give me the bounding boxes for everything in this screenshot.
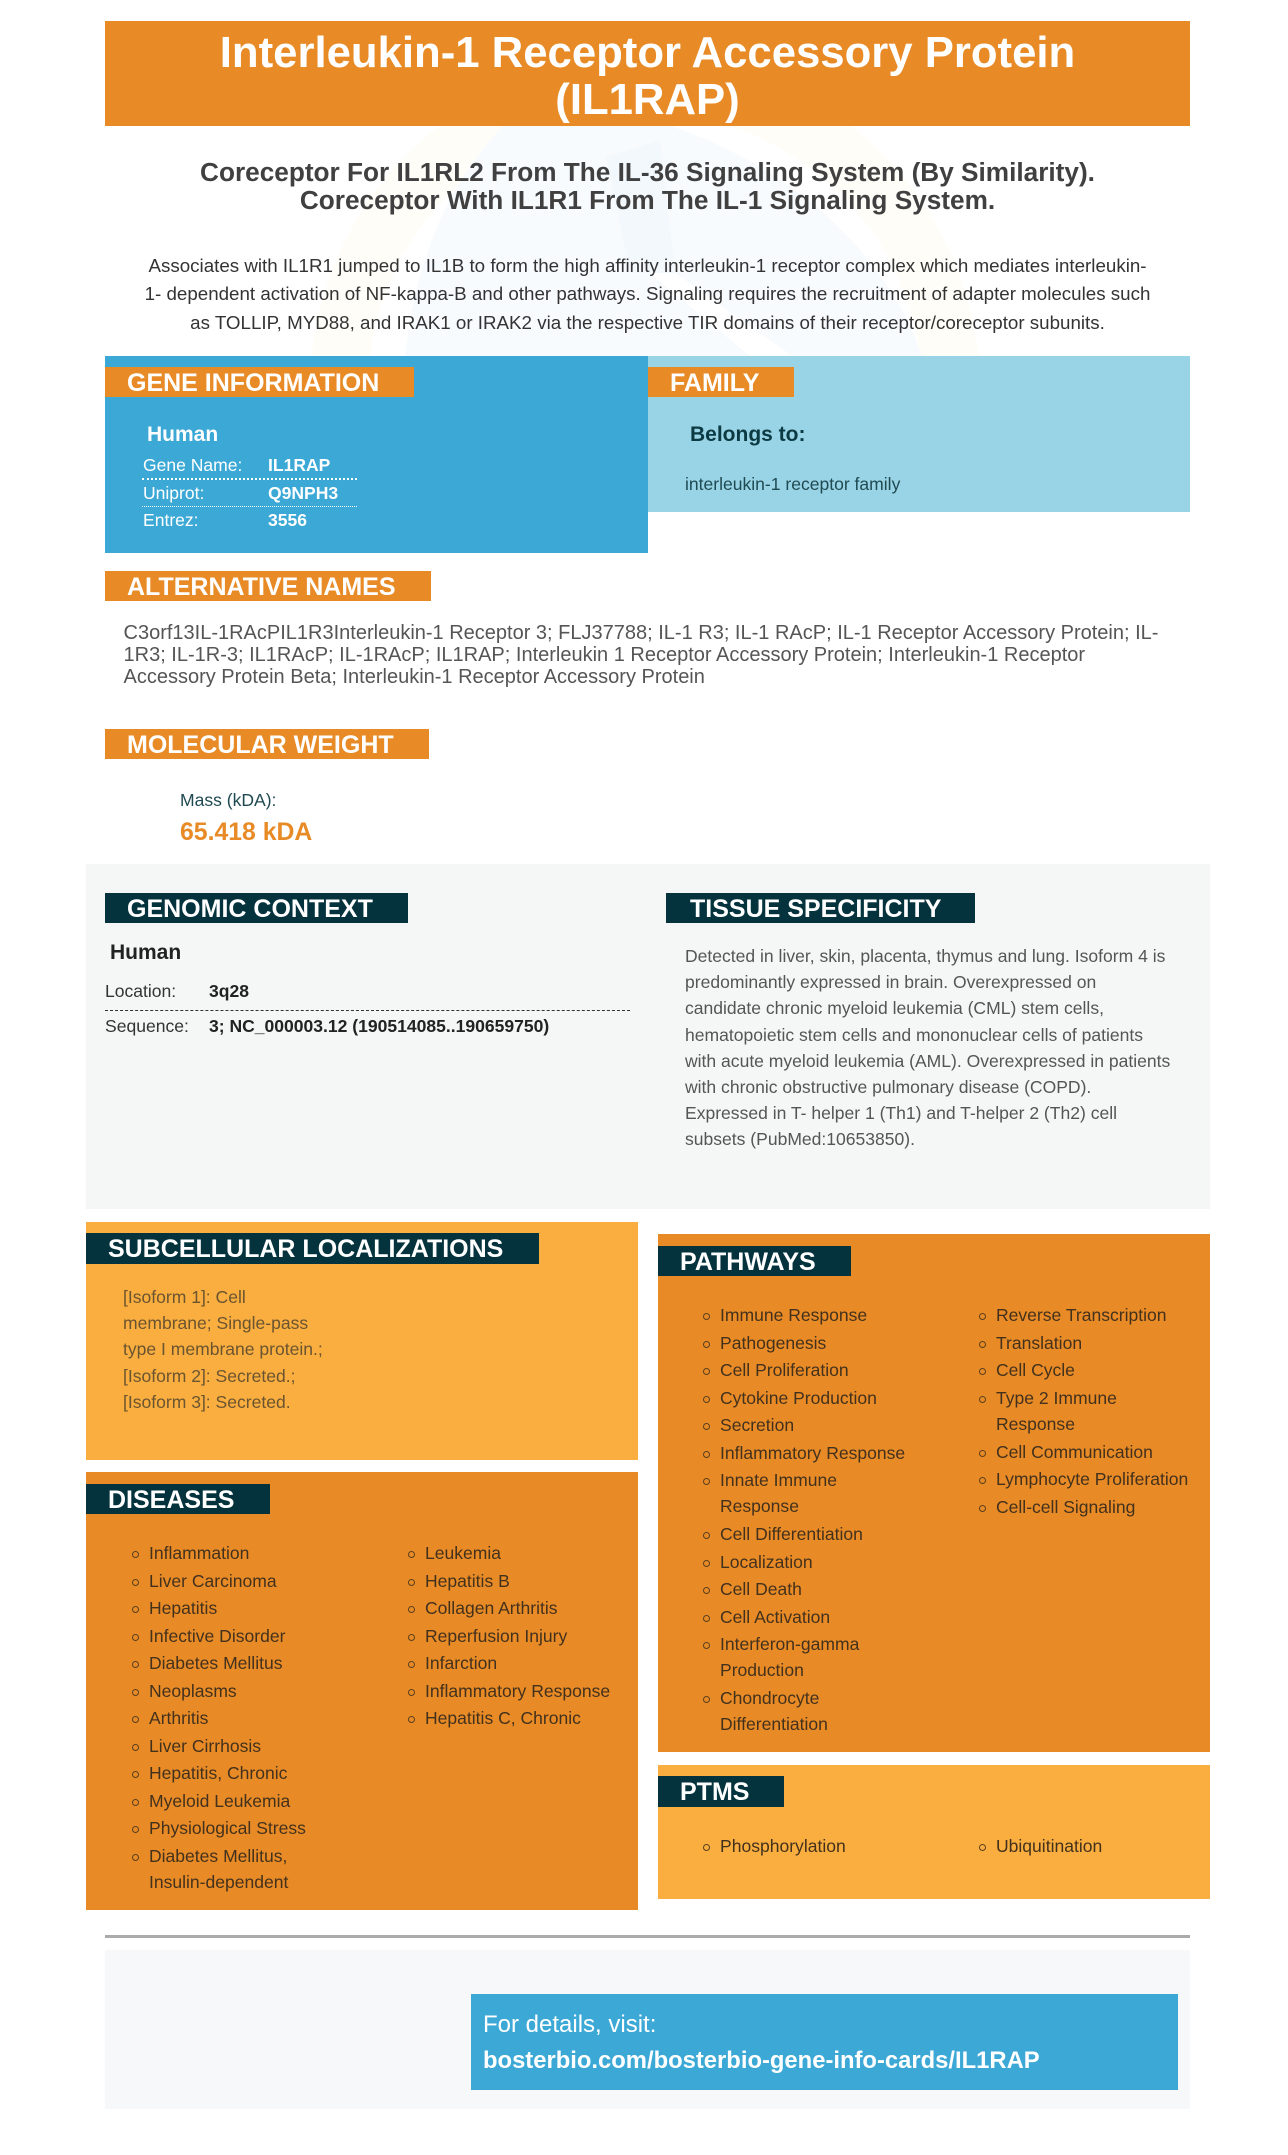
pathway list column 1: Immune Response [720, 1304, 867, 1324]
disease list column 2: Inflammatory Response [425, 1680, 610, 1700]
localization text: [Isoform 1]: Cell [123, 1287, 246, 1307]
disease list column 1 [132, 1542, 306, 1892]
pathway list column 1: Chondrocyte [720, 1688, 819, 1708]
location row: 3q28 [209, 981, 249, 1001]
localization text [123, 1287, 323, 1412]
heading: diseases: DISEASES [108, 1486, 234, 1514]
gene info table: Entrez: [143, 510, 199, 530]
intro paragraph: as TOLLIP, MYD88, and IRAK1 or IRAK2 via the respective TIR domains of their receptor/coreceptor subunits. [190, 312, 1105, 333]
sequence row: Sequence: [105, 1016, 189, 1036]
tissue specificity text: Detected in liver, skin, placenta, thymus and lung. Isoform 4 is [685, 946, 1165, 966]
panel: diseases [86, 1472, 638, 1910]
heading: pathways: PATHWAYS [680, 1248, 816, 1276]
disease list column 2 [408, 1542, 610, 1728]
title banner: Interleukin-1 Receptor Accessory Protein [220, 28, 1075, 77]
pathway list column 2: Lymphocyte Proliferation [996, 1468, 1188, 1488]
subtitle: Coreceptor For IL1RL2 From The IL-36 Signaling System (By Similarity). [200, 157, 1095, 187]
subtitle: Coreceptor With IL1R1 From The IL-1 Signaling System. [300, 185, 995, 215]
disease list column 1: Physiological Stress [149, 1818, 306, 1838]
belongs to label: Belongs to: [690, 423, 806, 446]
panel: gene information [105, 356, 648, 553]
disease list column 1: Diabetes Mellitus, [149, 1846, 287, 1866]
species label: Human [110, 941, 181, 964]
pathway list column 1: Innate Immune [720, 1470, 837, 1490]
pathway list column 2: Cell Cycle [996, 1360, 1075, 1380]
pathway list column 1: Cell Activation [720, 1606, 830, 1626]
gene info table [142, 455, 357, 530]
title banner [105, 21, 1190, 126]
panel: subcellular localizations [86, 1222, 638, 1460]
heading: PTMs [658, 1776, 784, 1807]
tissue specificity text [685, 946, 1170, 1149]
subtitle [200, 157, 1095, 215]
tissue specificity text: Expressed in T- helper 1 (Th1) and T-helper 2 (Th2) cell [685, 1103, 1117, 1123]
intro paragraph [145, 255, 1150, 333]
callout: details link [471, 1994, 1178, 2090]
panel: PTMs [658, 1765, 1210, 1899]
callout: details link: bosterbio.com/bosterbio-gene-info-cards/IL1RAP [483, 2046, 1040, 2074]
pathway list column 2: Response [996, 1414, 1075, 1434]
disease list column 1: Arthritis [149, 1708, 208, 1728]
pathway list column 1: Production [720, 1660, 804, 1680]
location row [105, 981, 249, 1001]
sequence row: 3; NC_000003.12 (190514085..190659750) [209, 1016, 549, 1036]
pathway list column 1: Inflammatory Response [720, 1442, 905, 1462]
disease list column 1: Insulin-dependent [149, 1872, 288, 1892]
pathway list column 1: Localization [720, 1552, 813, 1572]
PTM list column 1: Phosphorylation [720, 1836, 846, 1856]
alternative names text: Accessory Protein Beta; Interleukin-1 Receptor Accessory Protein [124, 666, 705, 688]
alternative names text [124, 622, 1158, 688]
disease list column 2: Hepatitis C, Chronic [425, 1708, 581, 1728]
disease list column 2: Leukemia [425, 1542, 501, 1562]
pathway list column 2: Cell-cell Signaling [996, 1496, 1135, 1516]
disease list column 1: Hepatitis, Chronic [149, 1762, 287, 1782]
location row: Location: [105, 981, 176, 1001]
PTM list column 2: Ubiquitination [996, 1836, 1102, 1856]
heading: family [648, 367, 794, 397]
mass value: 65.418 kDA [180, 819, 312, 846]
callout: details link: For details, visit: [483, 2011, 656, 2038]
family value: interleukin-1 receptor family [685, 474, 900, 494]
pathway list column 1: Pathogenesis [720, 1332, 826, 1352]
panel: pathways [658, 1234, 1210, 1752]
disease list column 1: Myeloid Leukemia [149, 1790, 290, 1810]
disease list column 1: Neoplasms [149, 1680, 237, 1700]
background watermark logo [606, 140, 675, 273]
tissue specificity text: with acute myeloid leukemia (AML). Overexpressed in patients [685, 1051, 1170, 1071]
heading: subcellular localizations: SUBCELLULAR LOCALIZATIONS [108, 1235, 503, 1263]
pathway list column 1 [703, 1304, 905, 1734]
mass label: Mass (kDA): [180, 790, 276, 810]
pathway list column 1: Cytokine Production [720, 1388, 877, 1408]
localization text: type I membrane protein.; [123, 1339, 323, 1359]
heading: diseases [86, 1484, 270, 1514]
alternative names text: 1R3; IL-1R-3; IL1RAcP; IL-1RAcP; IL1RAP; Interleukin 1 Receptor Accessory Protein; Interleukin-1 Receptor [124, 644, 1085, 666]
species label: Human [147, 423, 218, 446]
heading: family: FAMILY [670, 369, 759, 397]
localization text: membrane; Single-pass [123, 1313, 308, 1333]
intro paragraph: 1- dependent activation of NF-kappa-B and other pathways. Signaling requires the recruitment of adapter molecules such [145, 283, 1150, 304]
disease list column 1: Liver Carcinoma [149, 1570, 277, 1590]
disease list column 1: Liver Cirrhosis [149, 1736, 261, 1756]
gene info table: IL1RAP [268, 455, 330, 475]
tissue specificity text: predominantly expressed in brain. Overexpressed on [685, 972, 1096, 992]
pathway list column 1: Differentiation [720, 1714, 828, 1734]
tissue specificity text: candidate chronic myeloid leukemia (CML) stem cells, [685, 998, 1104, 1018]
intro paragraph: Associates with IL1R1 jumped to IL1B to form the high affinity interleukin-1 receptor complex which mediates interleukin- [148, 255, 1147, 276]
heading: pathways [658, 1246, 851, 1276]
disease list column 1: Hepatitis [149, 1598, 217, 1618]
pathway list column 1: Response [720, 1496, 799, 1516]
panel: grey context band [86, 864, 1210, 1209]
disease list column 1: Inflammation [149, 1542, 249, 1562]
pathway list column 2: Cell Communication [996, 1442, 1153, 1462]
gene info table: Uniprot: [143, 483, 204, 503]
alternative names text: C3orf13IL-1RAcPIL1R3Interleukin-1 Receptor 3; FLJ37788; IL-1 R3; IL-1 RAcP; IL-1 Receptor Accessory Protein; IL- [124, 622, 1158, 644]
tissue specificity text: subsets (PubMed:10653850). [685, 1129, 915, 1149]
localization text: [Isoform 2]: Secreted.; [123, 1366, 295, 1386]
heading: gene information: GENE INFORMATION [127, 369, 379, 397]
pathway list column 2: Translation [996, 1332, 1082, 1352]
tissue specificity text: hematopoietic stem cells and mononuclear cells of patients [685, 1025, 1143, 1045]
heading: PTMs: PTMS [680, 1778, 749, 1806]
pathway list column 1: Cell Differentiation [720, 1524, 863, 1544]
heading: tissue specificity: TISSUE SPECIFICITY [690, 895, 941, 923]
disease list column 1: Diabetes Mellitus [149, 1652, 282, 1672]
heading: molecular weight: MOLECULAR WEIGHT [127, 731, 394, 759]
pathway list column 1: Interferon-gamma [720, 1634, 859, 1654]
pathway list column 2: Type 2 Immune [996, 1388, 1117, 1408]
footer panel [105, 1950, 1190, 2109]
localization text: [Isoform 3]: Secreted. [123, 1392, 291, 1412]
disease list column 1: Infective Disorder [149, 1626, 285, 1646]
disease list column 2: Hepatitis B [425, 1570, 510, 1590]
heading: genomic context: GENOMIC CONTEXT [127, 895, 373, 923]
pathway list column 1: Secretion [720, 1414, 794, 1434]
gene info table: Q9NPH3 [268, 483, 338, 503]
tissue specificity text: with chronic obstructive pulmonary disease (COPD). [685, 1077, 1091, 1097]
pathway list column 1: Cell Death [720, 1578, 802, 1598]
disease list column 2: Reperfusion Injury [425, 1626, 567, 1646]
pathway list column 2: Reverse Transcription [996, 1304, 1167, 1324]
disease list column 2: Collagen Arthritis [425, 1598, 558, 1618]
gene info table: Gene Name: [143, 455, 242, 475]
pathway list column 1: Cell Proliferation [720, 1360, 849, 1380]
heading: alternative names: ALTERNATIVE NAMES [127, 573, 396, 601]
pathway list column 2 [979, 1304, 1188, 1516]
gene info table: 3556 [268, 510, 307, 530]
title banner: (IL1RAP) [555, 75, 740, 124]
panel: family [648, 356, 1190, 512]
disease list column 2: Infarction [425, 1652, 497, 1672]
